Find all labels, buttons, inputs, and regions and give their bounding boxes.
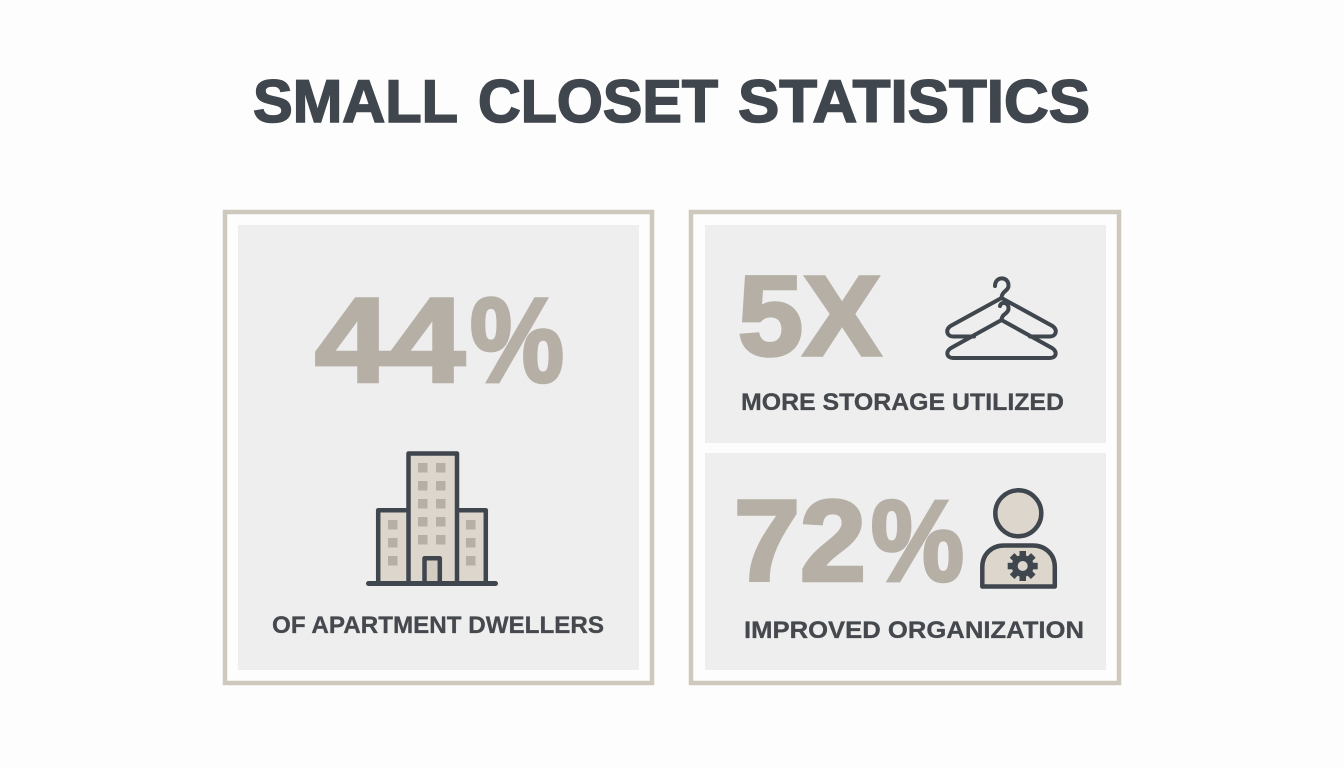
title: CLOSET: [478, 68, 718, 135]
title: STATISTICS: [738, 68, 1090, 135]
label: of apartment dwellers: OF APARTMENT DWELLERS: [272, 612, 604, 639]
stat: 44%: [315, 274, 564, 408]
stat: 72%: %: [871, 478, 964, 606]
panel: improved organization: [705, 453, 1106, 670]
panel: more storage: [705, 225, 1106, 443]
icon: person with gear: [982, 490, 1055, 586]
icon: hangers: [947, 278, 1056, 358]
panel: apartment dwellers: [225, 212, 652, 683]
stat: 44%: %: [470, 274, 564, 408]
stat: 44%: 44: [315, 274, 465, 408]
icon: apartment building: [368, 454, 496, 584]
title: SMALL: [253, 68, 458, 135]
stat: 5X: 5X: [738, 253, 881, 379]
label: improved organization: IMPROVED ORGANIZATION: [744, 617, 1084, 644]
label: more storage utilized: MORE STORAGE UTILIZED: [741, 389, 1064, 416]
title: [253, 68, 1090, 135]
stat: 72%: 72: [734, 478, 866, 606]
panel: right frame: [691, 212, 1119, 683]
stat: 72%: [734, 478, 964, 606]
